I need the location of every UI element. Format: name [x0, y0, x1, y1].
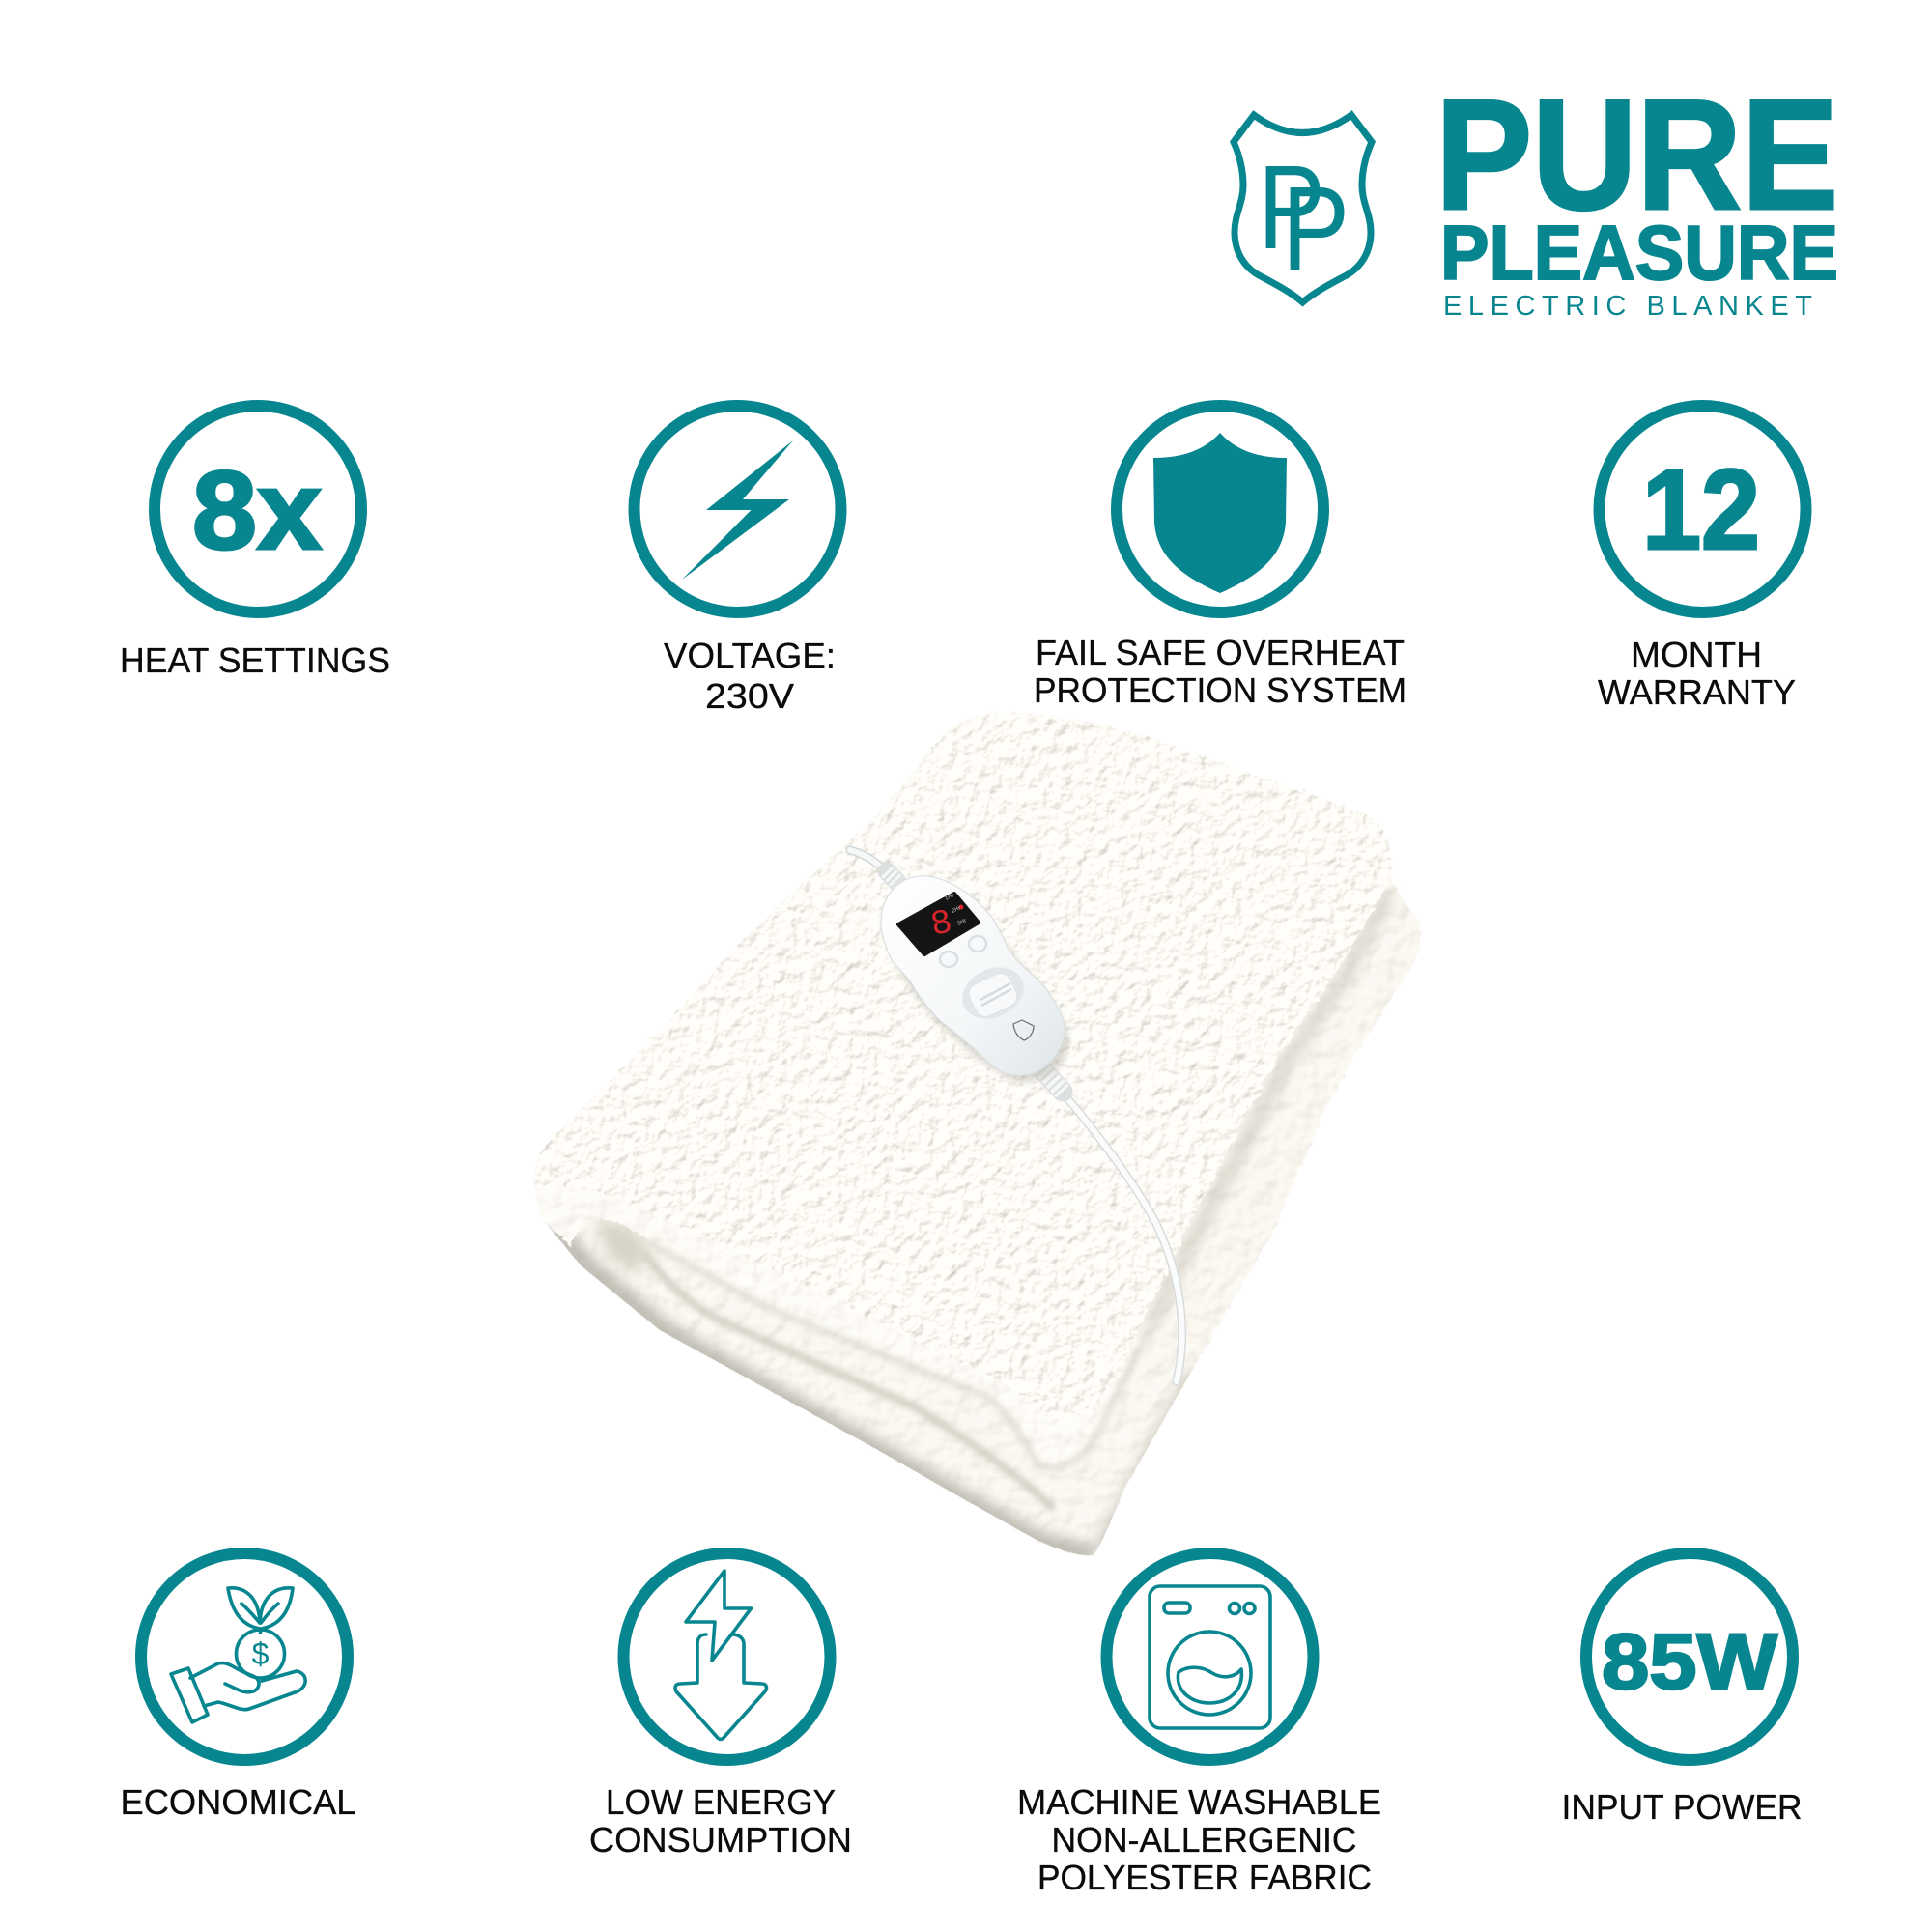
display timer labels: 1Hr [944, 893, 955, 902]
label: fail safe overheat protection system [1034, 633, 1406, 710]
logo wordmark: PURE: PURE [1435, 68, 1838, 242]
label: machine washable non-allergenic polyester fabric [1017, 1782, 1381, 1897]
feature: input power [1561, 1553, 1803, 1827]
label: economical: ECONOMICAL [120, 1782, 355, 1822]
feature: economical [120, 1553, 355, 1822]
label: month warranty: MONTH [1631, 635, 1762, 674]
icon: logo shield with PP monogram: P [1282, 163, 1350, 296]
remote controller [881, 876, 1065, 1075]
label: fail safe overheat protection system: FAIL SAFE OVERHEAT [1036, 633, 1405, 672]
label: fail safe overheat protection system: PROTECTION SYSTEM [1034, 670, 1406, 710]
feature: voltage [634, 406, 840, 716]
controller body [881, 876, 1065, 1075]
display timer labels: 3Hr [956, 918, 968, 927]
blanket lower layers [535, 713, 1421, 1555]
icon: lightning bolt in ring [634, 406, 840, 612]
icon: ring with 85W: 85W [1602, 1618, 1778, 1706]
logo wordmark: PLEASURE: PLEASURE [1440, 210, 1838, 296]
label: heat settings: HEAT SETTINGS [120, 640, 390, 680]
label: voltage 230V: 230V [705, 676, 794, 716]
power slider [954, 957, 1032, 1029]
display timer labels: 2Hr [951, 905, 962, 915]
feature: 8x heat settings [120, 406, 390, 680]
icon: logo shield with PP monogram: P [1258, 142, 1325, 274]
feature: 12 month warranty [1598, 406, 1806, 712]
label: voltage 230V: VOLTAGE: [664, 636, 836, 675]
icon: hand holding coin and sprout in ring [141, 1553, 348, 1760]
label: voltage 230V [664, 636, 836, 716]
feature: overheat protection [1034, 406, 1406, 710]
product photo: folded sherpa electric blanket [535, 713, 1421, 1557]
label: machine washable non-allergenic polyester fabric: POLYESTER FABRIC [1037, 1858, 1372, 1897]
feature: low energy consumption [589, 1553, 852, 1860]
blanket top fold [535, 713, 1392, 1423]
label: machine washable non-allergenic polyester fabric: NON-ALLERGENIC [1051, 1820, 1356, 1860]
icon: ring with 85W [1586, 1553, 1793, 1760]
icon: ring with 12: 12 [1642, 446, 1760, 574]
label: low energy consumption: CONSUMPTION [589, 1820, 852, 1860]
icon: logo shield with PP monogram [1234, 115, 1372, 302]
logo tagline: ELECTRIC BLANKET: ELECTRIC BLANKET [1443, 291, 1812, 322]
icon: ring with 8x [155, 406, 361, 612]
rolled rim of top fold [537, 1180, 1150, 1464]
power cord [850, 850, 1182, 1381]
label: low energy consumption [589, 1782, 852, 1860]
button: heat [940, 952, 957, 967]
label: low energy consumption: LOW ENERGY [606, 1782, 836, 1822]
button: timer [969, 936, 986, 952]
display digit: 8 [927, 902, 956, 946]
shading: shadow under top layer [1150, 894, 1389, 1328]
shading: line below rim [648, 1242, 1150, 1468]
icon: ring with 12 [1600, 406, 1806, 612]
LED display [898, 894, 979, 954]
label: machine washable non-allergenic polyester fabric: MACHINE WASHABLE [1017, 1782, 1381, 1822]
icon: washing machine in ring [1107, 1553, 1314, 1760]
icon: shield in ring [1117, 406, 1323, 612]
logo: Pure Pleasure brand [1234, 68, 1838, 322]
controller shadow [883, 881, 1068, 1082]
display indicator [959, 905, 963, 909]
icon: hand holding coin and sprout in ring: $ [252, 1636, 270, 1671]
icon: ring with 8x: 8x [192, 449, 322, 573]
shading: blanket underside [553, 1219, 1198, 1557]
feature: machine washable [1017, 1553, 1381, 1897]
label: month warranty: WARRANTY [1598, 672, 1796, 712]
icon: bolt and down arrow in ring [624, 1553, 831, 1760]
display timer labels [944, 893, 968, 927]
label: input power: INPUT POWER [1561, 1787, 1803, 1827]
label: month warranty [1598, 635, 1796, 712]
mini logo [1013, 1020, 1034, 1040]
